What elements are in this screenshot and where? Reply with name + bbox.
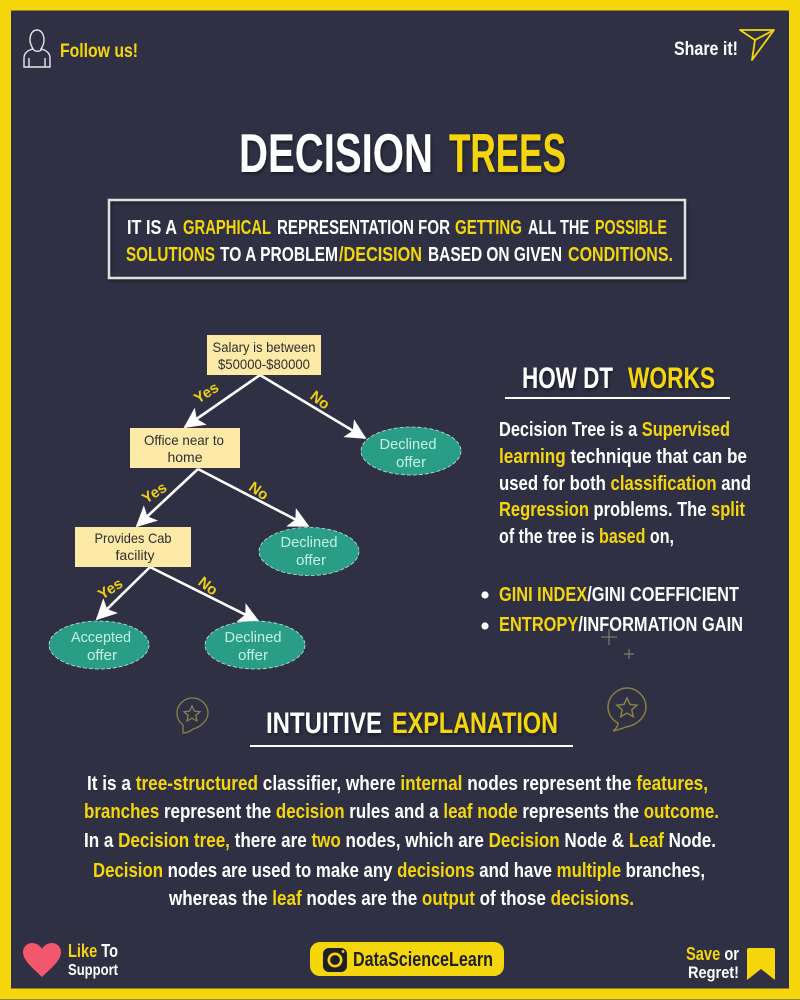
- definition line 2: [126, 243, 673, 266]
- branch labels: No: [195, 574, 221, 599]
- instagram handle pill: [310, 942, 504, 976]
- like to support: [23, 941, 119, 979]
- definition line 1: [127, 216, 667, 239]
- icon: sparkles: [601, 629, 634, 659]
- node: salary: Salary is between: [212, 339, 316, 355]
- branch labels: Yes: [95, 575, 126, 603]
- node: office: Office near to: [144, 432, 224, 448]
- like label: Like To: [68, 941, 118, 961]
- branch labels: No: [307, 388, 333, 413]
- node: salary: [207, 335, 321, 375]
- definition line 2: SOLUTIONS: [126, 243, 215, 266]
- branch labels: Yes: [139, 479, 170, 507]
- branch labels: Yes: [191, 379, 222, 407]
- leaf: declined 2: offer: [296, 552, 326, 569]
- explanation paragraph: In a Decision tree, there are two nodes, which are Decision Node & Leaf Node.: [84, 830, 716, 852]
- explanation text: Regression problems. The split: [499, 499, 745, 521]
- node: cab: [75, 527, 191, 567]
- branch labels: No: [246, 479, 272, 504]
- leaf: accepted: [49, 621, 149, 669]
- explanation paragraph: whereas the leaf nodes are the output of those decisions.: [168, 888, 634, 910]
- definition line 1: REPRESENTATION FOR: [277, 216, 450, 239]
- explanation text: used for both classification and: [499, 473, 751, 495]
- follow us: [24, 30, 138, 67]
- heading: intuitive explanation: EXPLANATION: [392, 707, 558, 740]
- node: cab: Provides Cab: [94, 530, 172, 546]
- icon: bookmark: [747, 948, 775, 980]
- handle label: DataScienceLearn: [353, 949, 493, 971]
- arrows: [97, 375, 365, 621]
- explanation text: [499, 419, 751, 548]
- definition line 1: IT IS A: [127, 216, 177, 239]
- share it label: Share it!: [674, 39, 738, 60]
- node: salary: $50000-$80000: [218, 356, 310, 372]
- follow us label: Follow us!: [60, 41, 138, 62]
- icon: person: [24, 30, 50, 67]
- bullet list: ENTROPY/INFORMATION GAIN: [499, 614, 743, 636]
- save or regret: [686, 944, 775, 982]
- title: DECISION: [239, 122, 433, 184]
- explanation text: Decision Tree is a Supervised: [499, 419, 730, 441]
- heading: intuitive explanation: INTUITIVE: [266, 707, 382, 740]
- definition line 1: GRAPHICAL: [183, 216, 271, 239]
- icon: instagram: [323, 948, 347, 972]
- heading: how dt works: WORKS: [628, 362, 715, 395]
- definition line 1: ALL THE: [528, 216, 589, 239]
- node: office: [130, 428, 240, 468]
- heading: how dt works: [522, 362, 715, 395]
- bullet list: GINI INDEX/GINI COEFFICIENT: [499, 584, 739, 606]
- icon: chat star left: [177, 698, 208, 733]
- definition line 2: TO A PROBLEM: [220, 243, 338, 266]
- leaf: declined 3: offer: [238, 647, 268, 664]
- icon: paper plane: [740, 30, 774, 60]
- leaf: declined 1: offer: [396, 454, 426, 471]
- definition line 1: POSSIBLE: [595, 216, 667, 239]
- explanation paragraph: branches represent the decision rules and a leaf node represents the outcome.: [84, 801, 719, 823]
- icon: heart: [23, 943, 61, 977]
- explanation text: of the tree is based on,: [499, 526, 674, 548]
- bullet list: [481, 584, 743, 636]
- branch labels: [95, 379, 333, 603]
- leaf: declined 2: [259, 528, 359, 576]
- regret label: Regret!: [688, 963, 739, 982]
- definition line 2: /DECISION: [339, 243, 422, 266]
- leaf: declined 1: [361, 427, 461, 475]
- definition line 1: GETTING: [455, 216, 522, 239]
- definition line 2: CONDITIONS.: [568, 243, 673, 266]
- decision tree diagram: [49, 335, 461, 669]
- node: cab: facility: [116, 547, 154, 563]
- heading: how dt works: HOW DT: [522, 362, 613, 395]
- save label: Save or: [686, 944, 739, 964]
- node: office: home: [168, 449, 203, 465]
- support label: Support: [68, 962, 119, 979]
- leaf: accepted: Accepted: [71, 629, 131, 646]
- explanation paragraph: It is a tree-structured classifier, where internal nodes represent the features,: [87, 773, 708, 795]
- explanation text: learning technique that can be: [499, 446, 747, 468]
- definition box: [109, 200, 685, 278]
- definition line 2: BASED ON GIVEN: [428, 243, 562, 266]
- leaf: declined 2: Declined: [280, 534, 338, 551]
- icon: chat star right: [608, 688, 646, 731]
- intuitive explanation section: [84, 707, 719, 910]
- leaf: declined 3: [205, 621, 305, 669]
- share it: [674, 30, 774, 60]
- explanation paragraph: Decision nodes are used to make any decisions and have multiple branches,: [93, 860, 705, 882]
- explanation paragraph: [84, 773, 719, 910]
- title: TREES: [449, 122, 566, 184]
- leaf: declined 1: Declined: [380, 436, 436, 453]
- heading: intuitive explanation: [266, 707, 558, 740]
- how dt works section: [481, 362, 751, 636]
- leaf: accepted: offer: [87, 647, 117, 664]
- leaf: declined 3: Declined: [224, 629, 282, 646]
